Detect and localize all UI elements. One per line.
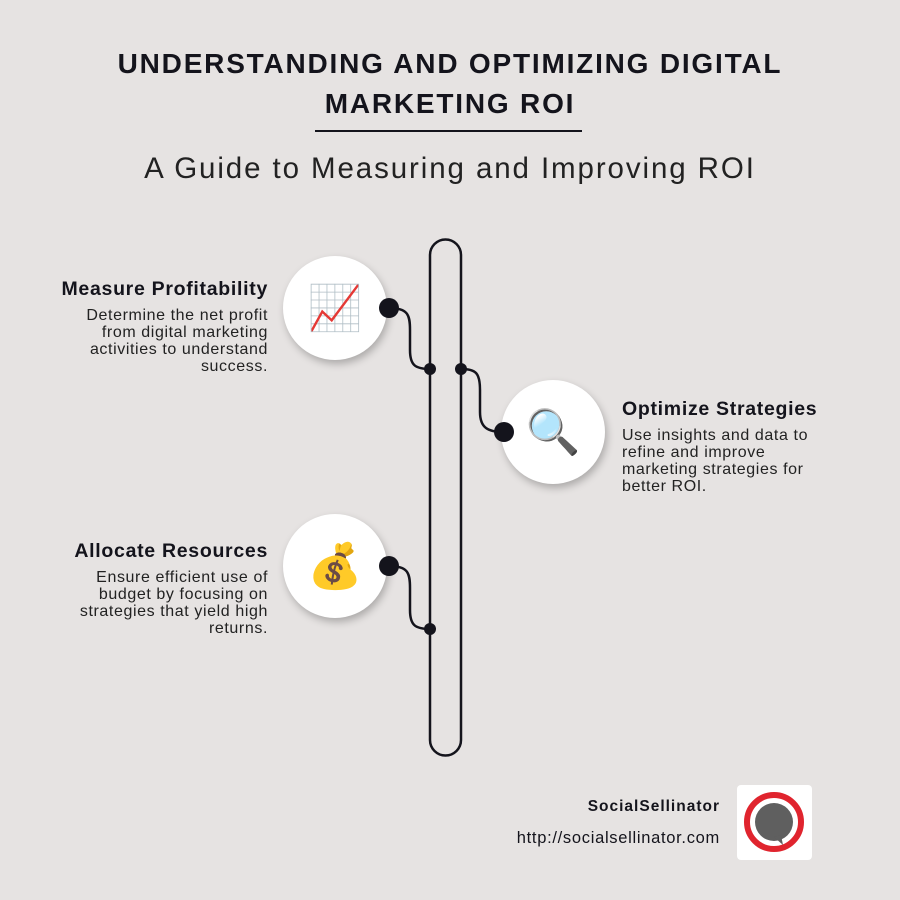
icon: chart: 📈 bbox=[308, 284, 362, 333]
text: allocate resources: returns. bbox=[209, 620, 268, 637]
title: MARKETING ROI bbox=[325, 88, 575, 119]
text: allocate resources: budget by focusing on bbox=[99, 586, 268, 603]
text: optimize strategies: Use insights and data to bbox=[622, 427, 808, 444]
text: measure profitability: from digital marketing bbox=[102, 324, 268, 341]
text: measure profitability: activities to understand bbox=[90, 341, 268, 358]
title underline bbox=[315, 130, 582, 132]
footer brand bbox=[517, 798, 720, 847]
text: measure profitability bbox=[61, 278, 268, 375]
text: optimize strategies: Optimize Strategies bbox=[622, 398, 817, 420]
text: allocate resources: Allocate Resources bbox=[74, 540, 268, 562]
title bbox=[118, 48, 782, 119]
text: optimize strategies: better ROI. bbox=[622, 478, 707, 495]
text: optimize strategies: refine and improve bbox=[622, 444, 765, 461]
footer brand: SocialSellinator bbox=[588, 798, 720, 815]
icon: money bag bbox=[283, 514, 387, 618]
title: UNDERSTANDING AND OPTIMIZING DIGITAL bbox=[118, 48, 782, 79]
icon: money bag: 💰 bbox=[308, 542, 362, 591]
icon: chart bbox=[283, 256, 387, 360]
text: optimize strategies: marketing strategies for bbox=[622, 461, 804, 478]
text: measure profitability: success. bbox=[201, 358, 268, 375]
text: allocate resources: strategies that yield high bbox=[80, 603, 268, 620]
text: measure profitability: Determine the net profit bbox=[86, 307, 268, 324]
footer brand: http://socialsellinator.com bbox=[517, 829, 720, 847]
text: measure profitability: Measure Profitability bbox=[61, 278, 268, 300]
icon: magnifier bbox=[501, 380, 605, 484]
text: allocate resources bbox=[74, 540, 268, 637]
text: allocate resources: Ensure efficient use of bbox=[96, 569, 268, 586]
subtitle: A Guide to Measuring and Improving ROI bbox=[144, 152, 756, 185]
logo bbox=[737, 785, 812, 860]
icon: magnifier: 🔍 bbox=[526, 408, 580, 457]
text: optimize strategies bbox=[622, 398, 817, 495]
